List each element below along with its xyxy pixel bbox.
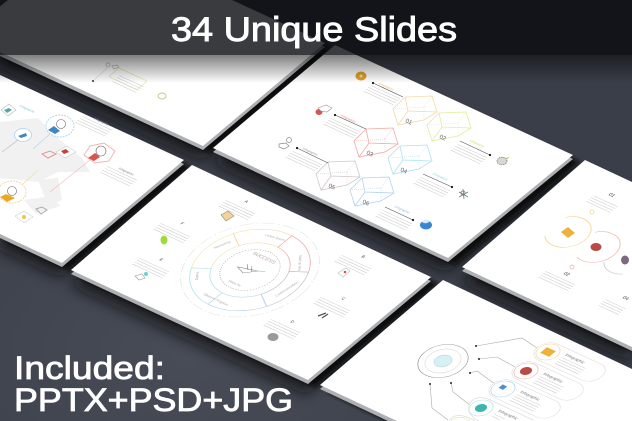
label 05	[286, 147, 328, 171]
cube 03	[354, 128, 398, 159]
rocket icon	[235, 262, 259, 277]
wheel chart: Observe Progress	[202, 293, 230, 307]
panel: wheel slide	[71, 165, 431, 384]
cube 01	[393, 96, 437, 127]
pill 4	[464, 397, 533, 421]
segment: teal	[170, 262, 236, 304]
cube 06: 06	[361, 199, 370, 208]
panel: top-left slide	[0, 0, 325, 150]
yellow tile marker	[15, 207, 47, 223]
cube 01: 01	[404, 118, 413, 127]
pill 1: Infographic	[564, 353, 587, 365]
callout 04: 04	[620, 295, 630, 302]
segment: grey	[254, 265, 314, 310]
ring: yellow	[542, 212, 594, 252]
leader lines	[50, 160, 90, 192]
infographic text: blue marker: Infographic	[92, 117, 110, 126]
icon: gear	[497, 156, 509, 165]
panel: right slide	[462, 160, 632, 351]
callout F: F	[179, 221, 186, 226]
icon D	[268, 333, 278, 341]
cube 02	[427, 112, 471, 143]
callout 02: 02	[561, 271, 571, 278]
icon: people outline	[279, 138, 292, 149]
callout C: C	[340, 296, 347, 301]
cube 06	[350, 177, 394, 208]
leader dot	[92, 80, 94, 82]
title: 34 Unique Slides	[171, 11, 457, 49]
small icons	[93, 63, 119, 81]
callout D: D	[289, 319, 296, 324]
footer text: included	[14, 350, 293, 418]
footer text: included: PPTX+PSD+JPG	[14, 382, 293, 418]
pill 5	[449, 416, 475, 420]
card text lines	[112, 76, 143, 93]
yellow text card	[109, 68, 147, 90]
callout 04	[598, 295, 630, 315]
label 04: Infographic	[431, 172, 449, 182]
dashed circle marker: yellow	[0, 181, 26, 203]
icon: orange coin	[356, 72, 366, 80]
segment: orange	[226, 217, 292, 258]
callout D	[264, 319, 300, 339]
label 03	[324, 114, 366, 138]
callout A: A	[243, 199, 250, 204]
icon E	[135, 272, 148, 280]
callout B: B	[360, 254, 367, 259]
icon F: green	[160, 236, 168, 244]
center text: SUCCESS	[250, 251, 277, 266]
pill 2: Infographic	[542, 372, 565, 384]
icon B	[338, 268, 350, 277]
callout F	[154, 221, 190, 243]
wheel chart: Steps for	[227, 279, 243, 288]
ring diagram	[407, 338, 479, 384]
icon: red figure	[316, 105, 332, 115]
panel: map slide	[0, 75, 184, 267]
label 01: Infographic	[377, 82, 395, 92]
pill 3: Infographic	[519, 390, 542, 402]
wheel chart	[152, 206, 348, 334]
ring: purple	[602, 245, 632, 275]
callout B	[335, 254, 371, 275]
cube 04: 04	[399, 167, 408, 176]
callout 02	[539, 271, 575, 291]
label 06: Infographic	[393, 205, 411, 215]
leader dots	[429, 345, 480, 385]
pill 4: Infographic	[497, 409, 520, 421]
ring icon	[158, 93, 166, 99]
wheel chart: Communication	[274, 281, 299, 297]
icon C	[318, 313, 328, 318]
callout E: E	[158, 257, 165, 262]
pill 2	[506, 358, 589, 404]
header band	[0, 0, 632, 55]
hexagon marker: red	[84, 143, 115, 163]
leader lines	[430, 338, 537, 420]
icon: blue pie	[420, 220, 432, 230]
markers	[590, 210, 594, 214]
ring: red	[572, 228, 622, 266]
label 06	[376, 205, 414, 230]
wheel chart: Testing	[195, 271, 200, 280]
callout C	[314, 296, 350, 317]
footer text: included: Included:	[14, 350, 165, 386]
label 01	[364, 82, 403, 105]
shade under header	[0, 55, 632, 83]
cube 04	[388, 145, 432, 176]
infographic text: red marker: Infographic	[117, 167, 135, 176]
cube 05	[316, 161, 360, 192]
label 03: Infographic	[339, 114, 357, 124]
teal label: Infographic	[18, 104, 36, 114]
icon A: folder	[221, 211, 234, 221]
panel: cubes slide	[213, 45, 573, 262]
callout E	[133, 257, 169, 278]
cube 02: 02	[438, 134, 447, 143]
pill 1	[528, 339, 611, 385]
red tile marker	[42, 146, 76, 158]
segment: yellow	[186, 230, 246, 275]
label 05: Infographic	[301, 147, 319, 157]
pill 3	[483, 376, 566, 421]
label 02: Infographic	[468, 139, 486, 149]
callout A	[219, 199, 255, 220]
callout 01	[586, 192, 617, 213]
segment: blue	[208, 282, 274, 323]
segment: red	[264, 236, 330, 278]
teal tile marker	[1, 104, 16, 116]
wheel chart: Lorem ipsum	[264, 233, 286, 242]
cube 03: 03	[365, 150, 374, 159]
callout 01: 01	[606, 192, 616, 199]
world map	[0, 118, 90, 214]
infographic text: blue marker	[75, 113, 116, 136]
icon: network	[459, 189, 468, 199]
cube 05: 05	[327, 183, 336, 192]
panel: pills slide	[320, 280, 632, 421]
dashed circle marker: blue	[46, 115, 74, 137]
infographic text: red marker	[100, 163, 141, 186]
label 02	[451, 139, 491, 164]
wheel chart: Marketing	[213, 240, 231, 250]
label 04	[414, 172, 453, 197]
small circle marker: blue	[14, 128, 32, 142]
wheel chart: Start Up Idea	[297, 255, 303, 271]
